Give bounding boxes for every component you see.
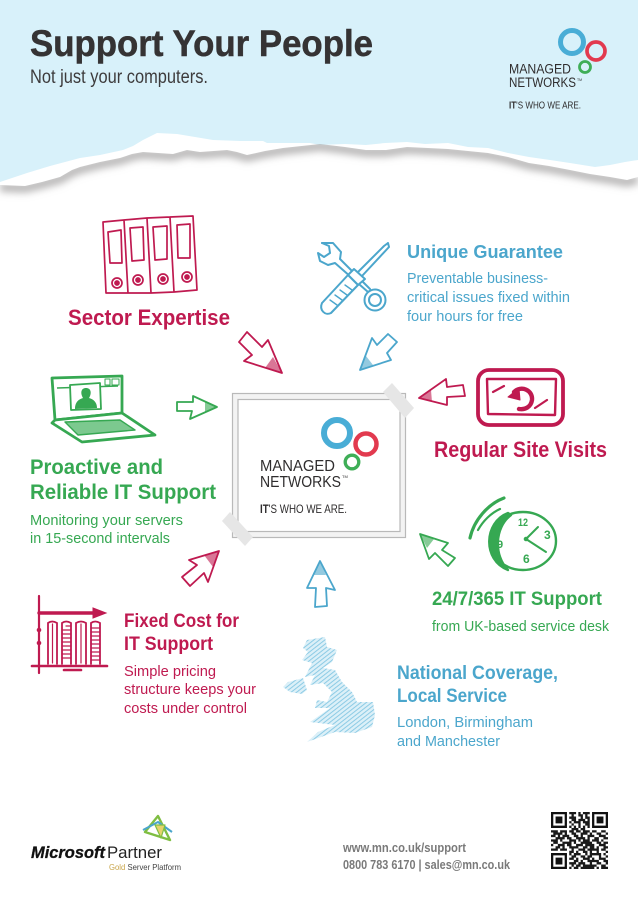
footer: Microsoft partner badge — [31, 816, 181, 872]
heading: proactive support: Proactive and — [30, 456, 163, 479]
icon: clock: 9 — [497, 539, 503, 551]
panel: 24/7/365 support — [432, 498, 609, 635]
footer: Microsoft partner badge: Partner — [107, 843, 162, 862]
footer: contact details: www.mn.co.uk/support — [342, 841, 467, 855]
heading: national coverage — [397, 662, 558, 707]
text: unique guarantee description — [407, 270, 570, 325]
icon: clock — [470, 498, 556, 570]
text: proactive description — [30, 512, 183, 547]
panel: centre logo card — [222, 383, 414, 546]
footer: contact details: 0800 783 6170 | sales@mn.co.uk — [343, 858, 510, 872]
text: proactive description: in 15-second intervals — [30, 530, 170, 547]
logo: centre: MANAGED — [260, 458, 335, 475]
QR code — [551, 813, 608, 868]
icon: UK map — [283, 637, 375, 742]
panel: unique guarantee — [318, 241, 570, 325]
icon: laptop — [52, 376, 155, 442]
logo: top right — [509, 30, 605, 112]
logo: centre — [260, 420, 376, 516]
arrow: 24/7 support to centre — [420, 534, 455, 566]
text: proactive description: Monitoring your servers — [30, 512, 183, 529]
logo: centre: TM — [342, 474, 348, 479]
icon: ring binders — [103, 216, 197, 293]
heading: 24/7/365 support: 24/7/365 IT Support — [432, 589, 603, 610]
footer: Microsoft partner badge: Microsoft — [31, 843, 106, 862]
logo: centre: NETWORKS — [260, 474, 341, 491]
heading: fixed cost: Fixed Cost for — [124, 610, 239, 632]
text: 24/7/365 description: from UK-based service desk — [432, 618, 609, 635]
logo: centre: IT'S WHO WE ARE. — [260, 502, 347, 516]
title: Support Your People — [30, 23, 373, 64]
heading: fixed cost — [124, 610, 239, 655]
icon: bar chart — [32, 596, 107, 673]
heading: proactive support: Reliable IT Support — [30, 481, 216, 504]
panel: sector expertise — [68, 216, 230, 330]
logo: top right: TM — [577, 78, 582, 82]
text: national coverage description: London, Birmingham — [397, 714, 533, 731]
panel: fixed cost — [32, 596, 256, 717]
text: national coverage description — [397, 714, 533, 750]
icon: site visit sign — [478, 370, 563, 425]
panel: national coverage — [283, 637, 558, 750]
arrow: site visits to centre — [419, 379, 465, 405]
footer: Microsoft partner badge: Gold Server Platform — [109, 862, 181, 872]
text: fixed cost description: Simple pricing — [124, 663, 216, 680]
icon: clock: 3 — [544, 528, 551, 542]
logo: top right: IT'S WHO WE ARE. — [509, 100, 581, 112]
heading: sector expertise: Sector Expertise — [68, 305, 230, 330]
heading: unique guarantee: Unique Guarantee — [407, 241, 563, 262]
text: unique guarantee description: Preventable business- — [407, 270, 548, 287]
icon: partner emblem — [143, 816, 172, 840]
arrow: sector expertise to centre — [239, 332, 282, 373]
heading: national coverage: National Coverage, — [397, 662, 558, 684]
icon: clock: 6 — [523, 552, 530, 566]
heading: proactive support — [30, 456, 216, 504]
heading: regular site visits: Regular Site Visits — [434, 437, 607, 462]
text: unique guarantee description: four hours for free — [407, 308, 523, 325]
torn paper header — [0, 0, 638, 188]
arrow: fixed cost to centre — [182, 551, 219, 586]
text: unique guarantee description: critical issues fixed within — [407, 289, 570, 306]
text: fixed cost description: costs under control — [124, 700, 247, 717]
arrow: national coverage to centre — [307, 561, 335, 607]
logo: top right: NETWORKS — [509, 75, 576, 90]
arrow: proactive support to centre — [177, 396, 217, 419]
icon: clock: 12 — [518, 517, 528, 529]
text: fixed cost description: structure keeps your — [124, 681, 256, 698]
panel: proactive support — [30, 376, 216, 547]
panel: regular site visits — [434, 370, 607, 462]
icon: wrench and screwdriver — [318, 243, 389, 314]
footer: contact details — [342, 841, 510, 872]
text: national coverage description: and Manchester — [397, 733, 500, 750]
subtitle: Not just your computers. — [30, 67, 208, 88]
heading: fixed cost: IT Support — [124, 633, 213, 655]
logo: top right: MANAGED — [509, 62, 571, 76]
arrow: unique guarantee to centre — [360, 334, 397, 370]
text: fixed cost description — [124, 663, 256, 717]
heading: national coverage: Local Service — [397, 685, 507, 707]
